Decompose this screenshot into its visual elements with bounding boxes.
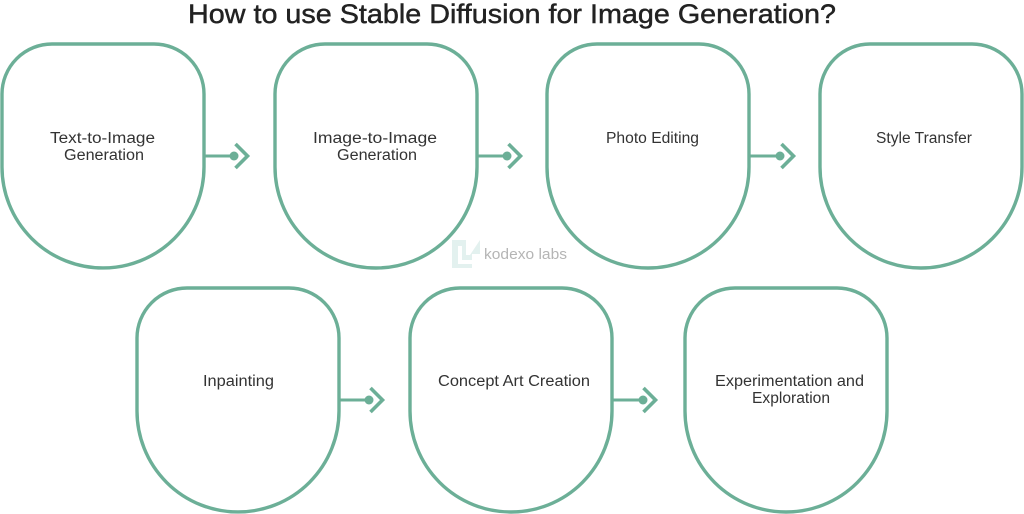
- arrow 4: [340, 388, 382, 412]
- panel: Text-to-Image Generation: Text-to-Image: [50, 130, 155, 147]
- watermark text: kodexo labs: [484, 247, 567, 263]
- arrow 3: [750, 144, 794, 168]
- panel: Photo Editing: Photo Editing: [606, 130, 699, 147]
- panel: Inpainting: [137, 288, 339, 512]
- panel: Concept Art Creation: [410, 288, 612, 512]
- panel: Experimentation and Exploration: Exploration: [752, 390, 830, 407]
- arrow 1: [205, 144, 248, 168]
- arrow 2: [478, 144, 520, 168]
- panel: Inpainting: Inpainting: [203, 373, 274, 390]
- panel: Experimentation and Exploration: [685, 288, 887, 512]
- panel: Style Transfer: Style Transfer: [876, 130, 972, 147]
- panel: Text-to-Image Generation: [2, 44, 204, 268]
- icon: kodexo labs logo: [452, 240, 480, 268]
- watermark logo: [452, 240, 567, 268]
- panel: Experimentation and Exploration: Experimentation and: [715, 373, 864, 390]
- panel: Style Transfer: [820, 44, 1022, 268]
- panel: Photo Editing: [547, 44, 749, 268]
- panel: Image-to-Image Generation: [275, 44, 477, 268]
- panel: Image-to-Image Generation: Generation: [337, 147, 417, 164]
- panel: Text-to-Image Generation: Generation: [64, 147, 144, 164]
- panel: Concept Art Creation: Concept Art Creation: [438, 373, 590, 390]
- panel: Image-to-Image Generation: Image-to-Image: [313, 130, 437, 147]
- arrow 5: [613, 388, 656, 412]
